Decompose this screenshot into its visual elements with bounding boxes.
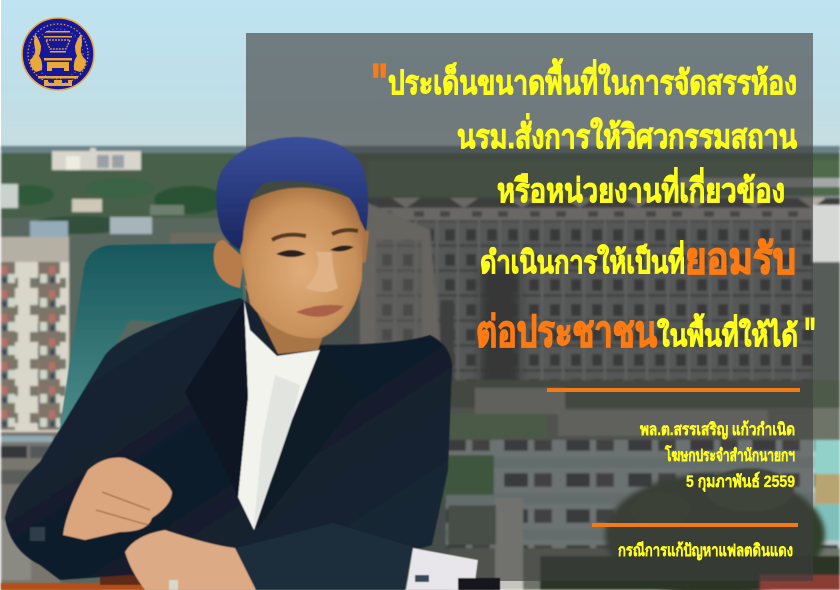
background: city photo <box>0 146 840 590</box>
icon: government seal <box>22 18 94 90</box>
quote line 1: " <box>371 54 388 112</box>
quote line 1 <box>371 54 797 112</box>
left tall block <box>1 237 69 432</box>
title: quote heading <box>371 54 816 360</box>
quote line 5 <box>476 308 816 360</box>
cuff buttons <box>30 527 45 541</box>
chair back <box>58 243 245 440</box>
divider: lower orange bar <box>592 523 798 527</box>
shirt <box>238 300 320 530</box>
tree canopy left <box>6 185 54 205</box>
desk <box>1 583 151 590</box>
hair <box>216 137 368 250</box>
face <box>240 188 364 338</box>
photo: man at desk <box>1 137 500 590</box>
ear right <box>358 225 369 265</box>
quote line 5: ในพื้นที่ให้ได้ <box>657 313 798 353</box>
green backdrop behind panel top <box>368 160 840 196</box>
background: sky <box>1 0 840 150</box>
attribution text block <box>640 420 795 492</box>
nose <box>305 252 338 292</box>
houses row <box>362 198 840 220</box>
attribution text block: 5 กุมภาพันธ์ 2559 <box>686 471 795 492</box>
quote line 5: ต่อประชาชน <box>476 308 657 355</box>
sleeve <box>236 523 413 590</box>
left hand <box>125 530 256 590</box>
quote line 5: " <box>804 308 816 360</box>
distant white building <box>52 151 141 170</box>
microphone <box>406 548 478 590</box>
divider: upper orange bar <box>547 388 800 392</box>
attribution text block: พล.ต.สรรเสริญ แก้วกำเนิด <box>640 420 795 440</box>
tree <box>605 473 825 590</box>
quote line 4 <box>480 235 796 282</box>
ear left <box>214 240 244 288</box>
quote line 3: หรือหน่วยงานที่เกี่ยวข้อง <box>497 167 785 209</box>
apartment block <box>360 220 840 380</box>
eyes and brows <box>272 230 358 240</box>
distant left-side rooftops <box>170 233 240 245</box>
quote line 4: ดำเนินการให้เป็นที่ <box>480 240 685 280</box>
lower right flats <box>450 408 840 590</box>
quote line 4: ยอมรับ <box>685 235 796 282</box>
panel: translucent quote panel <box>246 33 813 581</box>
right hand <box>63 458 172 540</box>
caption: topic: กรณีการแก้ปัญหาแฟลตดินแดง <box>618 540 793 561</box>
mouth <box>296 305 344 317</box>
lapels <box>185 300 248 497</box>
jacket <box>5 298 452 590</box>
neck <box>244 285 330 354</box>
